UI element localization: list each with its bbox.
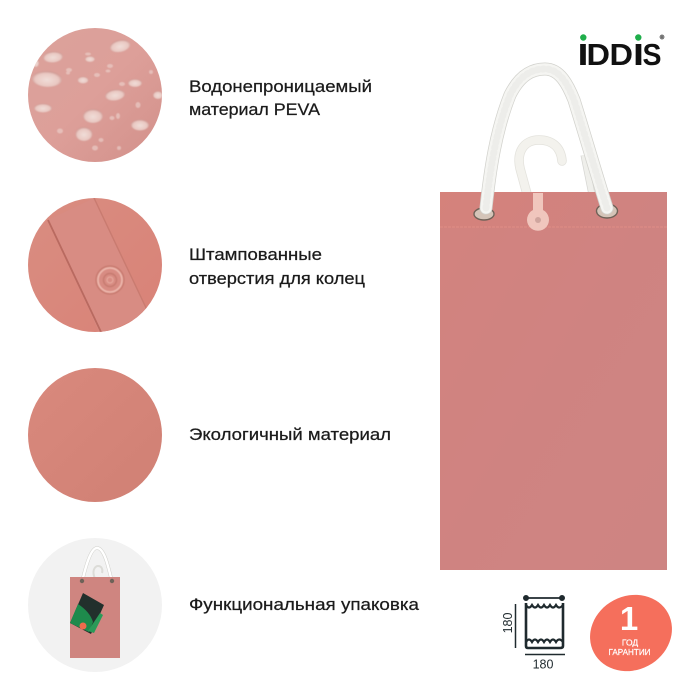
logo: IDDIS (578, 34, 665, 72)
label: stamped holes for rings: Штампованные (189, 245, 322, 264)
rope handle (486, 69, 607, 208)
badge: 1 year warranty (577, 581, 685, 685)
logo: IDDIS: D (586, 37, 610, 72)
icon: size 180x180: 180 (501, 613, 515, 633)
eyelets (474, 204, 618, 220)
logo: IDDIS: ® (660, 34, 665, 42)
photo: eco material swatch (28, 368, 162, 502)
badge: 1 year warranty: ГОД (622, 637, 638, 647)
logo: IDDIS: I (578, 37, 588, 72)
label: stamped holes for rings: отверстия для колец (189, 269, 365, 288)
label: functional packaging: Функциональная упаковка (189, 595, 420, 614)
bag body (440, 192, 667, 570)
label: waterproof material: материал PEVA (189, 100, 321, 119)
label: stamped holes for rings (189, 245, 365, 288)
label: waterproof material: Водонепроницаемый (189, 77, 372, 96)
label: waterproof material (189, 77, 372, 119)
logo: IDDIS: S (642, 37, 662, 72)
back rope strand (584, 155, 592, 195)
icon: size 180x180 (501, 596, 565, 672)
badge: 1 year warranty: 1 (620, 600, 638, 637)
badge: 1 year warranty: ГАРАНТИИ (608, 647, 650, 657)
label: eco material: Экологичный материал (189, 425, 391, 444)
logo: IDDIS: I (633, 37, 644, 72)
photo: stamped ring hole (28, 198, 162, 336)
logo: IDDIS: D (610, 37, 633, 72)
hook tab (527, 193, 549, 231)
product: shower curtain bag (440, 69, 667, 570)
photo: packaging thumbnail (28, 538, 162, 672)
icon: size 180x180: 180 (533, 658, 553, 672)
hook (519, 140, 562, 194)
photo: water droplets on fabric (28, 28, 163, 162)
